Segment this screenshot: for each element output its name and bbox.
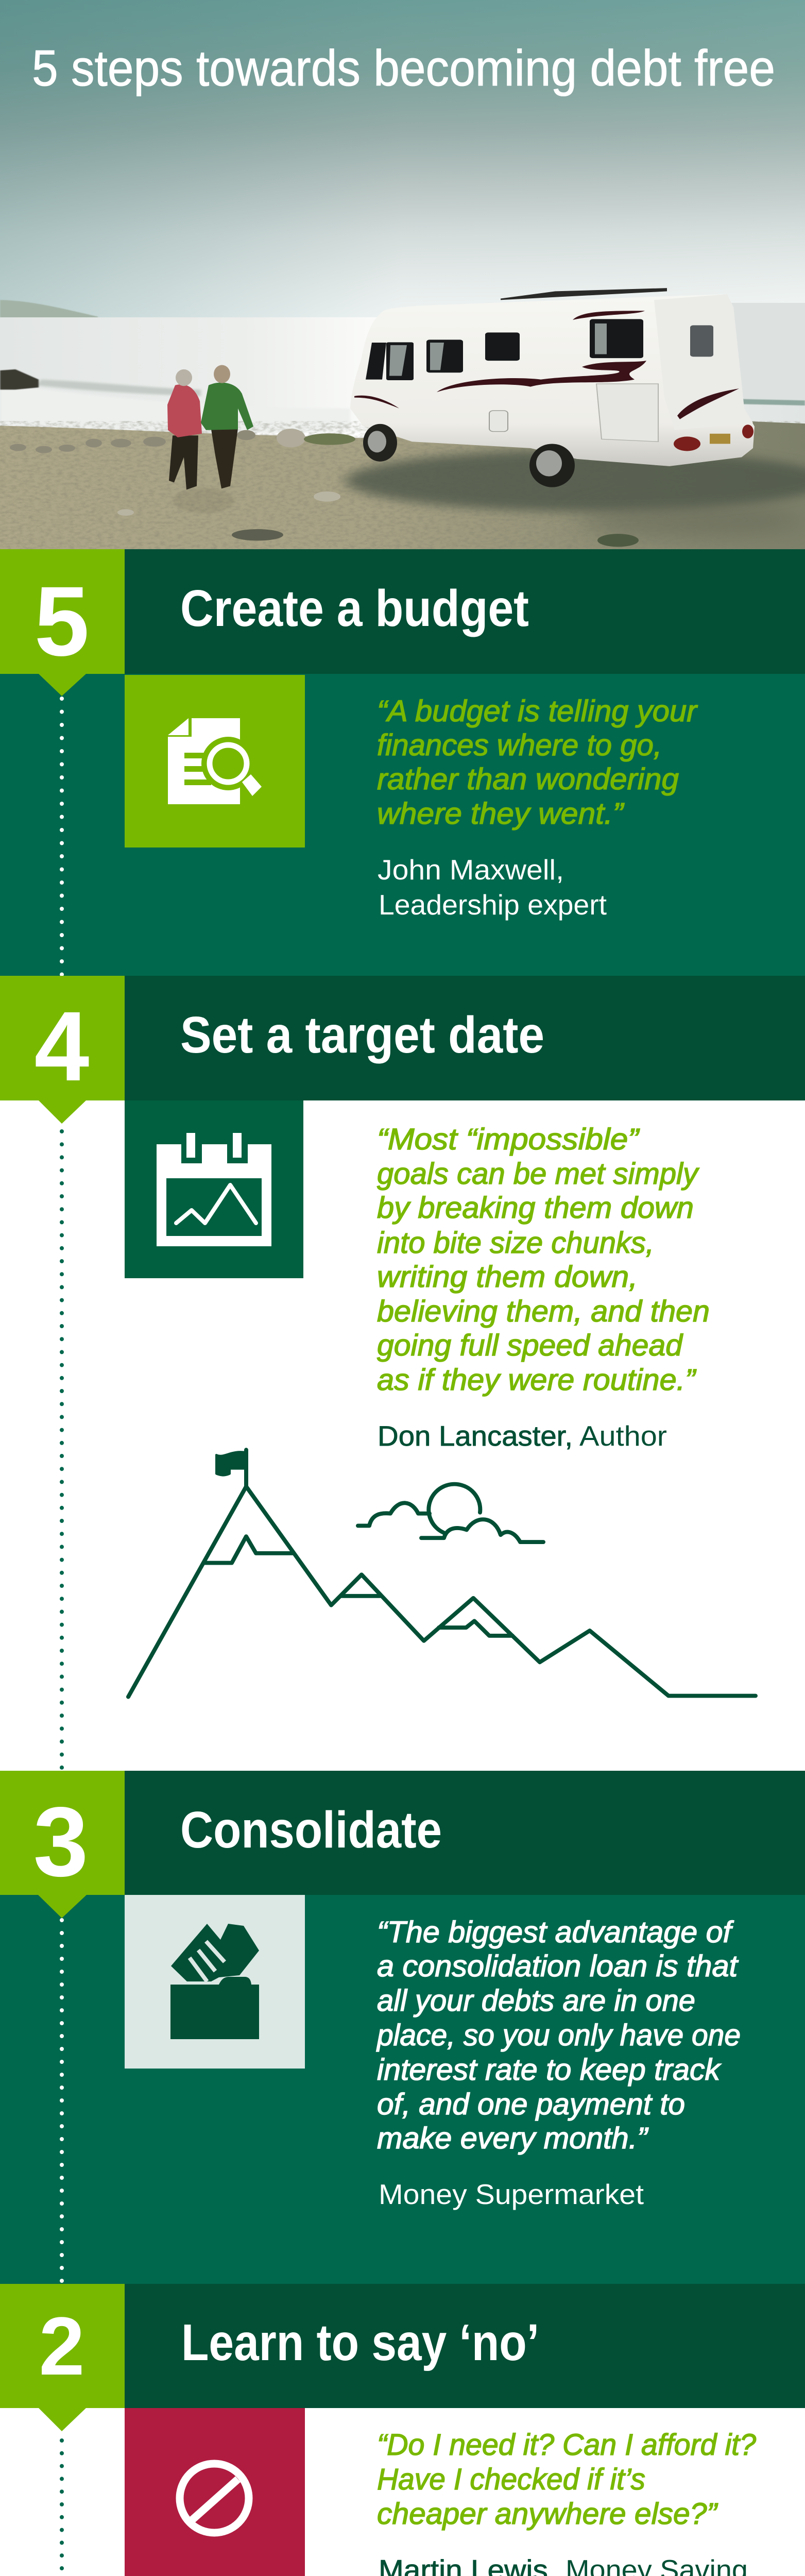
attribution: Author: [579, 1420, 667, 1452]
quote: rather than wondering: [377, 762, 679, 796]
quote: going full speed ahead: [377, 1329, 683, 1362]
quote: where they went.”: [377, 797, 625, 831]
quote: believing them, and then: [377, 1295, 710, 1328]
wheels: [363, 424, 397, 462]
step header bar: [125, 2284, 805, 2408]
step number 2: 2: [39, 2300, 84, 2392]
icon: couple walking on the beach: [167, 365, 253, 513]
icon: document with magnifying glass: [125, 675, 305, 848]
quote: as if they were routine.”: [377, 1363, 697, 1397]
quote: [377, 2428, 757, 2531]
shore stones: [10, 429, 340, 540]
heading: Consolidate: [180, 1801, 442, 1859]
quote: of, and one payment to: [377, 2088, 685, 2121]
dotted connector: [60, 2441, 64, 2576]
distant headland: [0, 300, 98, 318]
quote: into bite size chunks,: [377, 1226, 654, 1260]
attribution: [379, 2554, 748, 2576]
quote: “The biggest advantage of: [377, 1916, 734, 1949]
quote: [377, 694, 698, 831]
step number 3: [0, 1771, 125, 1918]
hero photo: motorhome on a beach with title: [0, 0, 805, 549]
step number 3: 3: [33, 1786, 88, 1897]
attribution: Don Lancaster,: [378, 1420, 573, 1452]
step number 5: [0, 549, 125, 696]
attribution: Leadership expert: [379, 889, 607, 921]
heading: Create a budget: [180, 580, 529, 637]
quote: [377, 1123, 710, 1397]
quote: make every month.”: [377, 2122, 649, 2155]
panel: step 4 set a target date: [0, 976, 805, 1771]
attribution: [378, 854, 607, 921]
step header bar: [125, 549, 805, 674]
step header bar: [125, 976, 805, 1100]
step number 2: [0, 2284, 125, 2431]
step number 4: [0, 976, 125, 1124]
icon: motorhome: [350, 288, 755, 487]
dotted connector: [60, 699, 64, 975]
heading: Learn to say ‘no’: [181, 2314, 539, 2371]
beach: [0, 421, 805, 549]
quote: place, so you only have one: [376, 2019, 741, 2052]
panel: step 2 learn to say no: [0, 2284, 805, 2576]
attribution: John Maxwell,: [378, 854, 564, 886]
attribution: Money Supermarket: [379, 2178, 644, 2210]
quote: “A budget is telling your: [377, 694, 698, 728]
quote: all your debts are in one: [377, 1984, 695, 2018]
icon: prohibition sign: [125, 2408, 305, 2576]
quote: interest rate to keep track: [377, 2053, 722, 2087]
icon: paper dropping into folder: [125, 1895, 305, 2069]
dotted connector: [60, 1131, 64, 1770]
quote: by breaking them down: [377, 1191, 694, 1225]
quote: Have I checked if it’s: [377, 2463, 645, 2496]
attribution: [378, 1420, 667, 1452]
quote: cheaper anywhere else?”: [377, 2497, 718, 2531]
quote: “Most “impossible”: [377, 1123, 640, 1156]
step header bar: [125, 1771, 805, 1895]
tail lights and plate: [674, 436, 700, 451]
step number 4: 4: [35, 991, 89, 1101]
panel: step 5 create a budget: [0, 549, 805, 976]
quote: a consolidation loan is that: [377, 1950, 739, 1983]
dotted connector: [60, 1920, 64, 2283]
quote: [376, 1916, 741, 2155]
icon: calendar: [125, 1100, 303, 1278]
quote: “Do I need it? Can I afford it?: [377, 2428, 757, 2462]
quote: finances where to go,: [377, 728, 662, 762]
heading: Set a target date: [180, 1006, 544, 1064]
panel: step 3 consolidate: [0, 1771, 805, 2284]
quote: goals can be met simply: [377, 1157, 699, 1191]
illustration: mountains, flag, sun and clouds: [128, 1450, 756, 1697]
step number 5: 5: [35, 566, 89, 676]
quote: writing them down,: [377, 1260, 638, 1294]
